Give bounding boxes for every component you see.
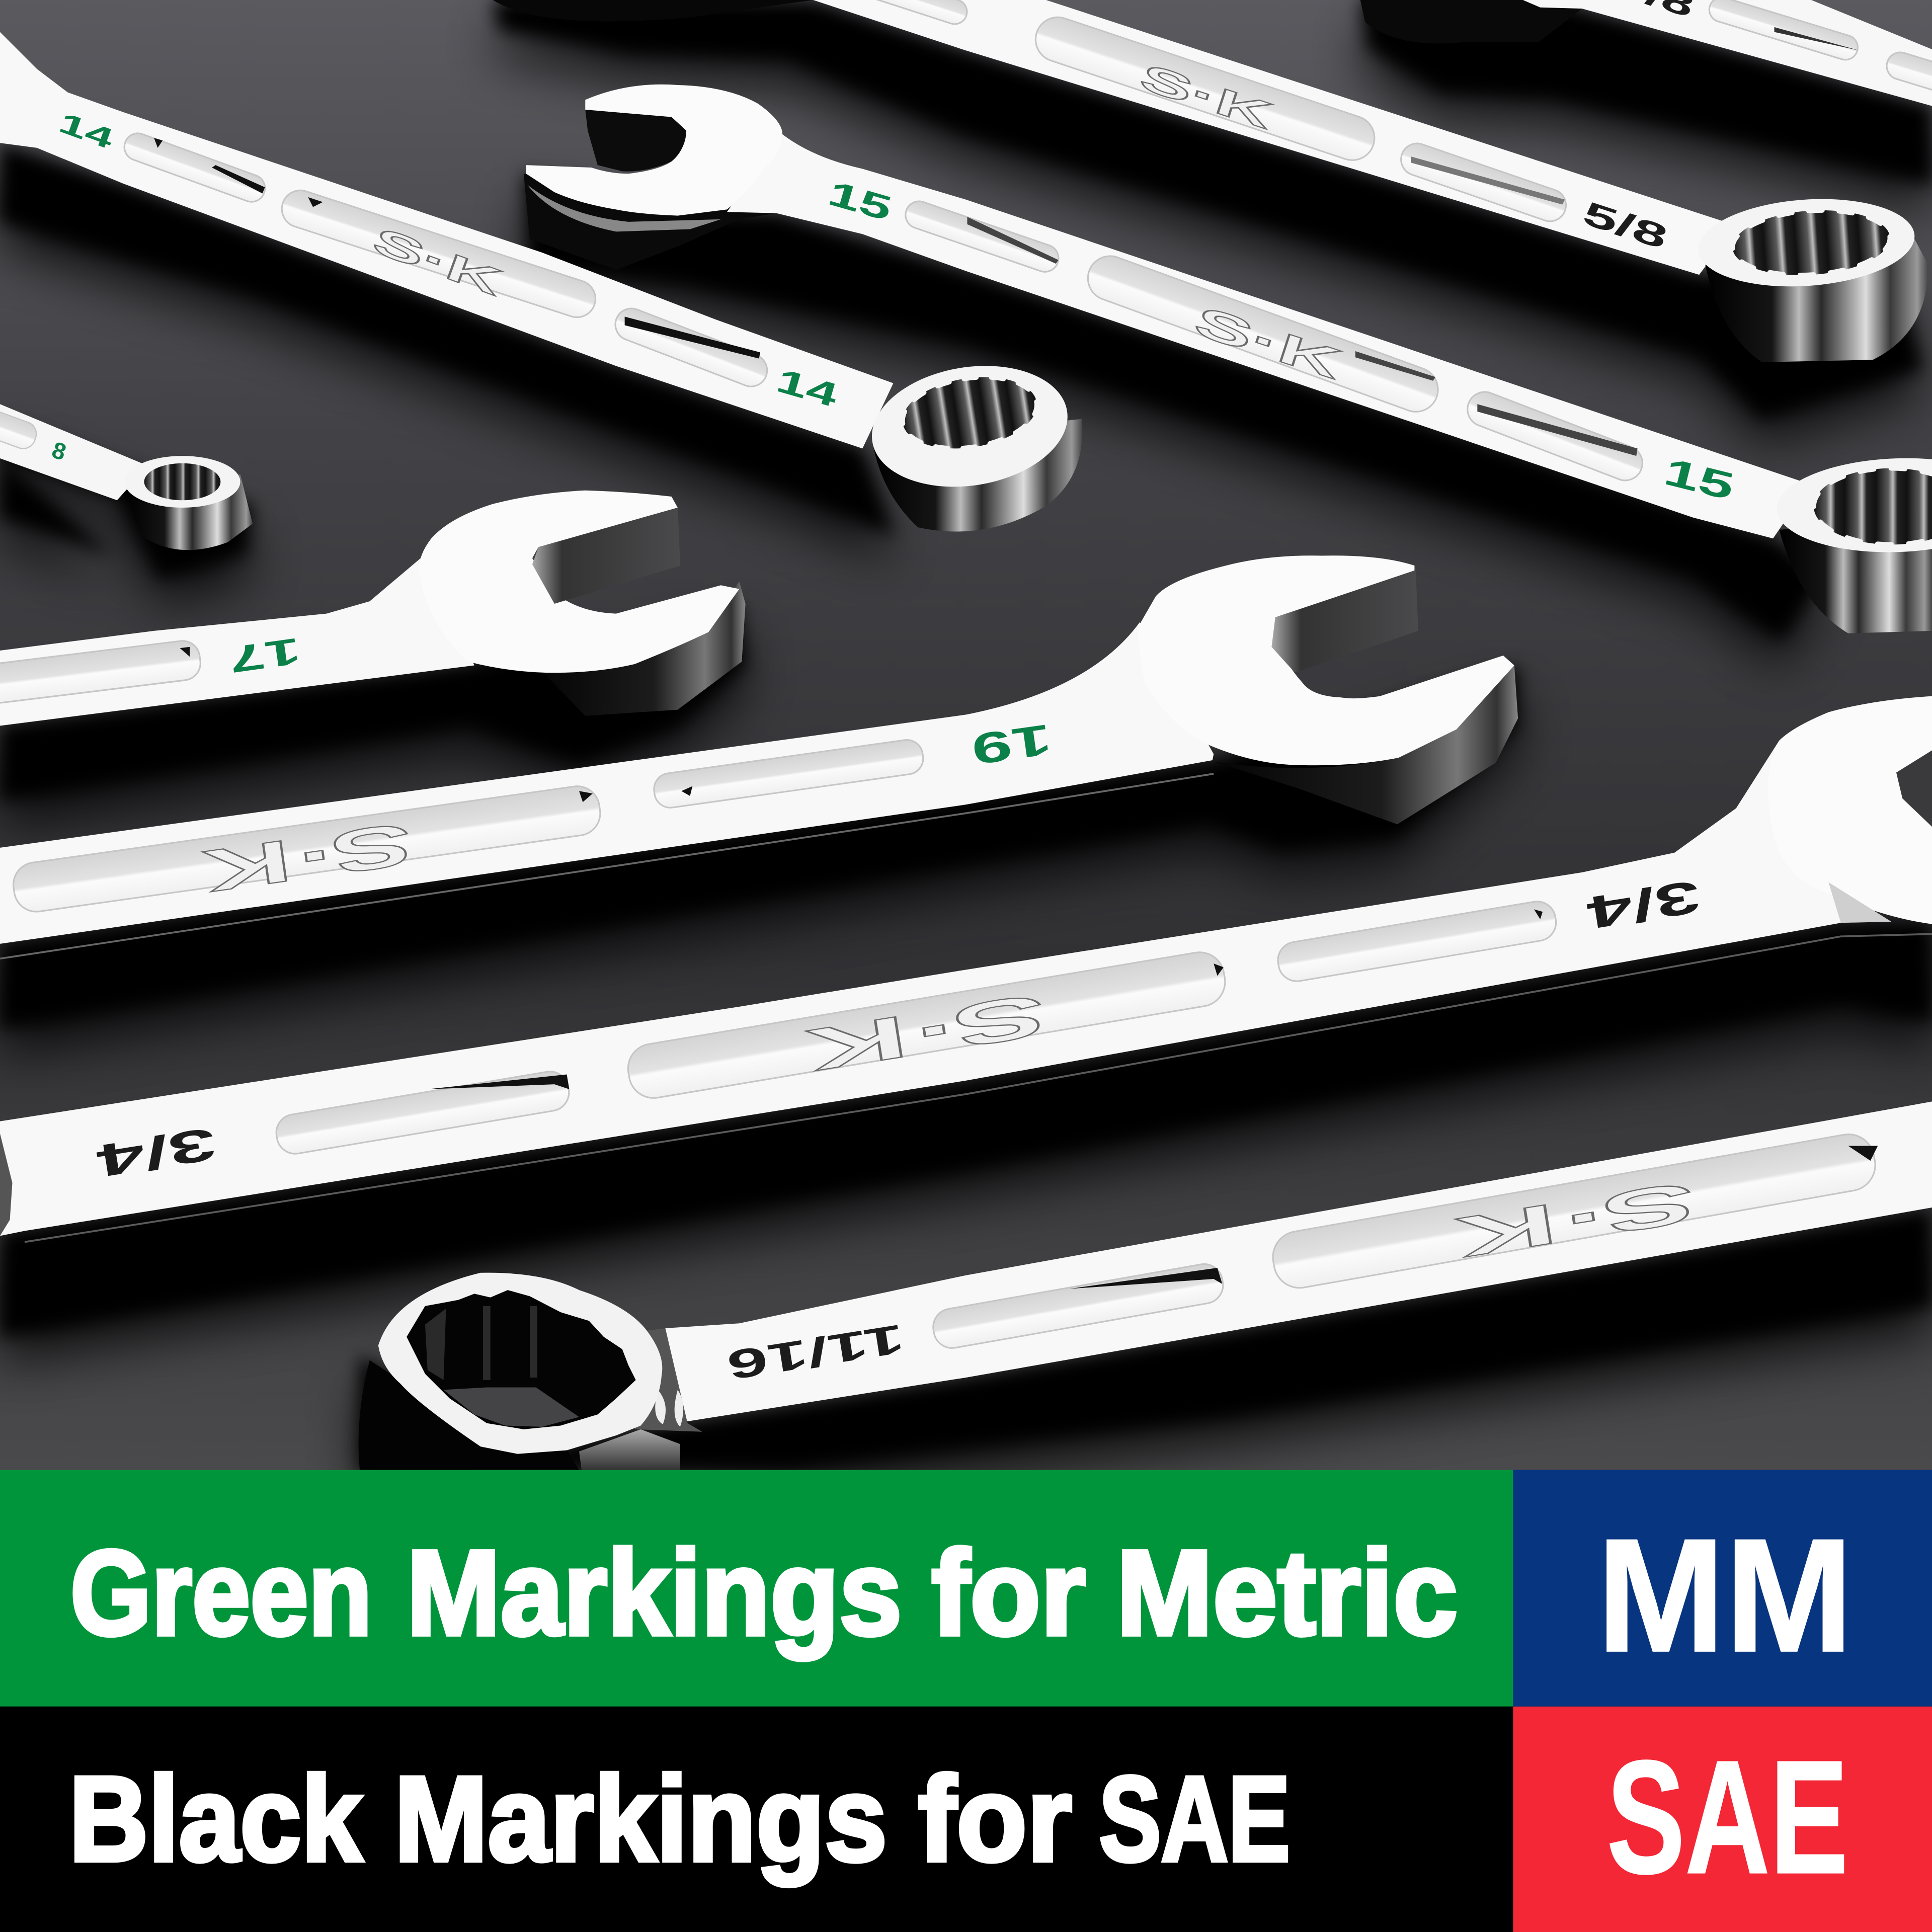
soft and hard shadows under the wrenches [0,0,1932,1497]
slot [0,639,202,706]
ring hole [407,1290,636,1429]
wrench: 3/4 SAE combination: S·K [803,981,1051,1084]
handle slots [902,198,1647,486]
handle [0,741,1841,1236]
handle slots [11,738,925,915]
handle [665,1101,1932,1422]
open end head [526,85,782,216]
under edge line [25,934,1932,1242]
wrench: 15 mm combination [524,85,1932,633]
ring end [1705,228,1928,362]
slot glint [1775,27,1860,50]
heading: black markings: Markings [394,1751,887,1886]
wrench: 5/8 SAE combination: S·K [1136,55,1277,137]
heading: black markings [69,1751,1290,1886]
handle slots [274,899,1559,1157]
open end head [419,491,739,673]
jaw [532,508,680,604]
wrench: 3/4 SAE combination: 3/4 [94,1117,219,1186]
heading: green markings: Green [70,1525,372,1660]
wrench: SAE top right [1360,0,1932,106]
band: black markings for SAE [0,1707,1513,1932]
wrench: 15 mm combination: S·K [1189,297,1346,388]
markings: 15 [824,174,896,228]
wrench: 3/4 SAE combination [0,696,1932,1242]
dark slot glints [154,138,760,359]
handle [0,32,894,448]
wrench: 8 mm combination [0,404,253,550]
heading: black markings: Black [69,1751,362,1886]
wrench: 14 mm combination: 14 [772,362,842,415]
ring end [1779,518,1932,633]
jaw end [493,0,813,22]
handle slots [822,0,1570,225]
heading: green markings: for [931,1525,1086,1660]
ring interior ridges [425,1306,537,1380]
heading: green markings: Markings [407,1525,902,1660]
neck chrome [1828,882,1891,923]
open end head [1137,555,1514,765]
ring end [872,419,1082,532]
SAE label: SAE [1606,1727,1848,1907]
jaw [1896,750,1932,827]
handle slots [121,129,772,391]
table seen through ring [444,1388,579,1427]
handle [1523,0,1932,106]
under edge line [0,774,1214,958]
heading: black markings: SAE [1099,1751,1290,1886]
slot [0,406,40,452]
dark slot glints [579,786,692,802]
markings: 19 [969,715,1055,774]
photo background: dark surface [0,0,1932,1470]
marking: 17 [226,630,303,681]
wrench: 17 mm combination [0,491,746,726]
ring end [378,1273,662,1454]
dark slot glints [1070,1146,1878,1289]
wrench: 14 mm combination [0,32,1082,532]
wrench: 5/8 SAE combination [493,0,1928,362]
badge: SAE [1513,1707,1932,1932]
wrench: 11/16 SAE combination: S·K [1453,1170,1700,1270]
band: green markings for metric [0,1470,1513,1707]
badge: MM [1513,1470,1932,1707]
dark slot glints [428,909,1543,1089]
handle [0,622,1214,944]
reflection below neck [579,1429,680,1470]
wrench: 14 mm combination: S·K [368,219,507,303]
MM label: MM [1597,1505,1853,1685]
wrench: 19 mm combination: S·K [200,811,416,905]
markings: 5/8 [1578,194,1672,257]
heading: green markings: Metric [1116,1525,1458,1660]
head side [542,582,746,716]
wrench: 15 mm combination: 15 [1660,450,1738,509]
jaw [1271,571,1418,673]
jaw [585,110,686,172]
open end head [1768,696,1932,924]
handle slots [1706,0,1932,104]
markings: 11/16 [724,1315,908,1388]
marking: 8 [49,437,69,465]
neck chrome [634,1328,702,1432]
slot glint [180,647,190,657]
markings: 3/4 [1584,870,1704,938]
ring end [127,474,253,550]
head chrome glint [527,185,721,231]
handle [0,404,148,500]
heading: black markings: for [918,1751,1072,1886]
wrench: 19 mm combination [0,555,1518,958]
handle [0,554,474,726]
markings: 14 [55,106,118,155]
wrench: 11/16 SAE combination [359,1101,1932,1470]
head side [524,174,776,270]
handle [813,0,1736,275]
left ring fragment [0,1134,12,1236]
jaw end [1360,0,1582,43]
heading: green markings [70,1525,1458,1660]
handle [727,134,1810,538]
neck highlights [655,1390,683,1427]
head side [1214,665,1518,824]
ring side shadow [359,1360,579,1470]
slot glint [1411,156,1565,205]
handle slots [930,1130,1879,1351]
dark slot glints [967,217,1638,456]
